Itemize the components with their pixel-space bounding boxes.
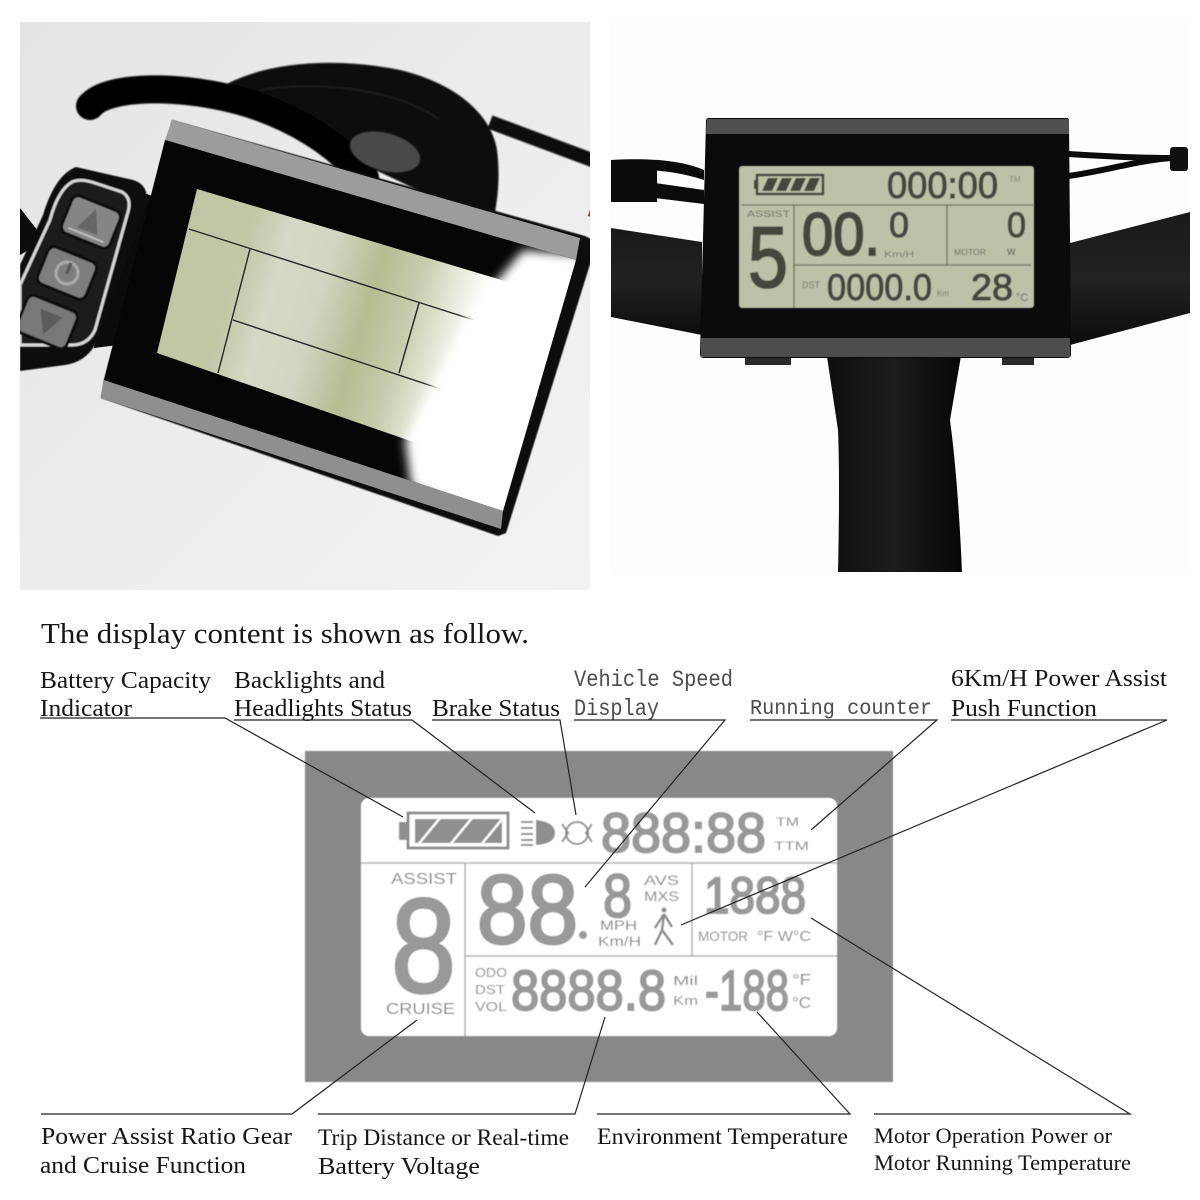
photo: angled display with control pad xyxy=(14,22,640,590)
gear reading: 5 xyxy=(748,210,788,306)
speed digits: 88 xyxy=(477,855,578,964)
label: Backlights and Headlights Status: Backlights and xyxy=(234,668,385,694)
speed unit: Km/H xyxy=(884,250,914,259)
label: Power Assist Ratio Gear and Cruise Function: Power Assist Ratio Gear xyxy=(41,1124,292,1150)
speed reading: 00. xyxy=(802,201,880,268)
heading: The display content is shown as follow. xyxy=(41,619,529,650)
device casing xyxy=(101,120,597,536)
LCD dividers xyxy=(741,205,1033,308)
label: Battery Capacity Indicator xyxy=(40,668,403,817)
mount feet xyxy=(745,358,1034,365)
screen dividers xyxy=(361,863,837,1036)
MXS label: MXS xyxy=(644,888,679,904)
ODO label: ODO xyxy=(475,965,507,980)
label: Environment Temperature xyxy=(597,1012,850,1149)
display unit xyxy=(100,119,590,537)
label: Motor Operation Power or Motor Running Temperature xyxy=(811,918,1131,1175)
motor unit: W xyxy=(1007,247,1016,257)
TTM label: TTM xyxy=(774,839,809,853)
timer digits: 888:88 xyxy=(601,801,766,864)
speed point xyxy=(579,931,587,939)
label: Motor Operation Power or Motor Running Temperature: Motor Operation Power or xyxy=(874,1123,1113,1148)
temperature digits: -188 xyxy=(705,959,789,1023)
label: Vehicle Speed Display: Vehicle Speed xyxy=(574,667,733,693)
motor digits: 1888 xyxy=(704,867,806,924)
label: 6Km/H Power Assist Push Function: 6Km/H Power Assist xyxy=(951,666,1167,692)
label: Battery Capacity Indicator: Battery Capacity xyxy=(40,668,211,694)
gear digit: 8 xyxy=(391,872,456,1021)
label: Trip Distance or Real-time Battery Voltage: Trip Distance or Real-time xyxy=(318,1125,569,1150)
icon: battery xyxy=(399,813,508,848)
MOTOR: MOTOR xyxy=(954,248,986,257)
label: Power Assist Ratio Gear and Cruise Function xyxy=(40,1020,417,1179)
TM label: TM xyxy=(776,815,799,829)
distance reading: 0000.0 xyxy=(827,267,932,308)
label: Power Assist Ratio Gear and Cruise Function: and Cruise Function xyxy=(40,1153,246,1179)
label: Trip Distance or Real-time Battery Voltage: Battery Voltage xyxy=(318,1154,480,1180)
red connector speck xyxy=(588,210,590,217)
bottom silver band xyxy=(101,380,503,529)
TM: TM xyxy=(1009,175,1021,184)
label: 6Km/H Power Assist Push Function xyxy=(681,666,1167,925)
cables left xyxy=(611,159,704,204)
speed decimal: 0 xyxy=(889,206,909,245)
CRUISE label: CRUISE xyxy=(386,1001,455,1018)
LCD screen xyxy=(157,189,507,442)
speed decimal digit: 8 xyxy=(603,862,632,930)
label: Environment Temperature: Environment Temperature xyxy=(597,1124,848,1149)
label: Brake Status: Brake Status xyxy=(432,696,560,722)
label: Vehicle Speed Display: Display xyxy=(574,696,659,722)
ASSIST label: ASSIST xyxy=(391,871,457,888)
black bezel xyxy=(104,140,576,511)
icon: brake xyxy=(562,822,592,844)
ASSIST: ASSIST xyxy=(747,209,791,219)
DST label: DST xyxy=(475,982,505,997)
top band xyxy=(706,119,1069,134)
button: power xyxy=(35,245,99,301)
label: Running counter xyxy=(750,698,937,830)
icon: walking person xyxy=(655,908,673,945)
DST: DST xyxy=(802,280,821,290)
label: Battery Capacity Indicator: Indicator xyxy=(40,696,132,722)
LCD divider lines xyxy=(189,229,474,389)
motor units: °F W°C xyxy=(757,928,811,945)
display body xyxy=(700,118,1071,358)
cable highlight hole xyxy=(349,130,421,174)
temperature reading: 28 xyxy=(971,267,1013,308)
Celsius label: °C xyxy=(792,995,811,1012)
icon: headlight xyxy=(521,820,555,845)
screen glare xyxy=(397,244,576,511)
handlebar right xyxy=(1070,212,1190,345)
left cable stub xyxy=(20,208,37,255)
control pad link xyxy=(94,194,151,348)
right connector xyxy=(1170,147,1188,171)
distance unit: Km xyxy=(937,289,949,298)
temperature unit: °C xyxy=(1016,292,1028,304)
Fahrenheit label: °F xyxy=(792,972,811,989)
battery icon xyxy=(754,175,823,194)
LCD xyxy=(739,165,1034,308)
cables right xyxy=(1068,154,1172,176)
label: Running counter: Running counter xyxy=(750,698,932,721)
label: Motor Operation Power or Motor Running Temperature: Motor Running Temperature xyxy=(874,1150,1131,1175)
AVS label: AVS xyxy=(644,872,679,888)
label: 6Km/H Power Assist Push Function: Push Function xyxy=(951,696,1097,722)
diagram casing xyxy=(305,751,893,1082)
MOTOR label: MOTOR xyxy=(698,928,748,944)
VOL label: VOL xyxy=(475,999,507,1014)
Km label: Km xyxy=(673,993,698,1008)
Km/H label: Km/H xyxy=(598,933,641,949)
bottom band xyxy=(701,338,1070,357)
distance digits: 8888.8 xyxy=(511,959,666,1023)
motor reading: 0 xyxy=(1007,206,1026,245)
button: down xyxy=(20,294,78,348)
button: up xyxy=(59,194,123,250)
label: Vehicle Speed Display xyxy=(574,667,733,887)
Mil label: Mil xyxy=(673,973,698,988)
cable coil behind the display xyxy=(90,63,600,215)
handlebar left xyxy=(611,228,702,335)
label: Backlights and Headlights Status xyxy=(234,668,535,813)
label: Backlights and Headlights Status: Headlights Status xyxy=(234,696,412,722)
label: Trip Distance or Real-time Battery Voltage xyxy=(318,1017,605,1180)
photo: handlebar-mounted display xyxy=(611,118,1190,572)
diagram screen xyxy=(361,798,837,1036)
stem xyxy=(826,350,962,572)
top silver band xyxy=(165,120,580,260)
MPH label: MPH xyxy=(600,917,637,933)
timer reading: 000:00 xyxy=(887,165,998,206)
display diagram xyxy=(305,751,893,1082)
label: Brake Status xyxy=(432,696,576,815)
control pad xyxy=(14,167,147,371)
